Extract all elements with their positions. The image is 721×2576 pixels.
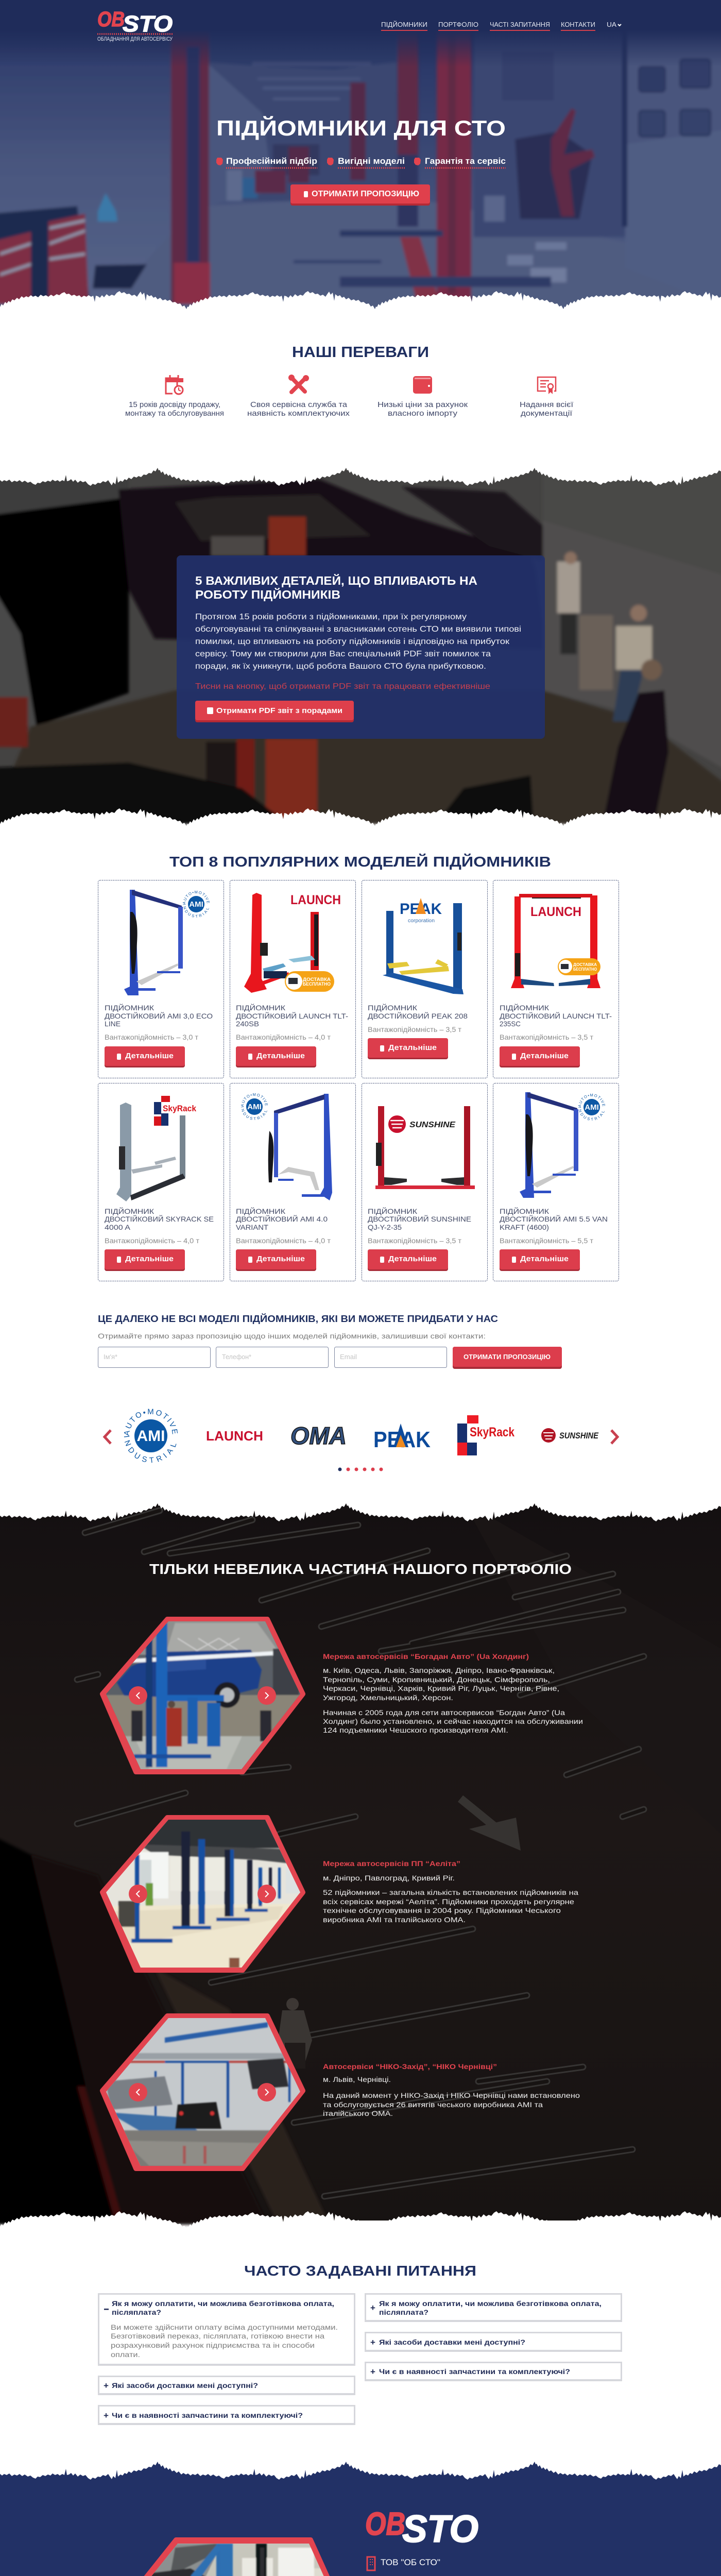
card: SkyRack SE 4000 A	[98, 1083, 224, 1281]
nav button previous	[129, 1686, 147, 1705]
project 1 title: Мережа автосервісів “Богадан Авто” (Ua Холдинг)	[323, 1652, 529, 1660]
FAQ right item 3: +	[370, 2367, 375, 2377]
button: PDF report	[195, 701, 354, 722]
hero bullets	[216, 156, 506, 168]
card text: ДВОСТІЙКОВИЙ PEAK 208	[368, 1011, 468, 1020]
project 1 cities	[323, 1666, 559, 1702]
portfolio part	[0, 1503, 721, 2227]
advantage text 4: документації	[521, 409, 573, 418]
logo: AMI: INDUSTRIAL	[124, 1436, 176, 1463]
card text: ДВОСТІЙКОВИЙ LAUNCH TLT-	[500, 1011, 612, 1020]
FAQ left item 1 open: Як я можу оплатити, чи можлива безготівкова оплата,	[112, 2299, 334, 2308]
hero button: ОТРИМАТИ ПРОПОЗИЦІЮ	[312, 190, 419, 198]
Sunshine logo	[388, 1115, 456, 1133]
logo: AMI	[122, 1408, 180, 1465]
button	[105, 1046, 185, 1067]
free delivery badge	[558, 958, 600, 975]
lift image	[124, 890, 183, 995]
project 2 cities: м. Дніпро, Павлоград, Кривий Ріг.	[323, 1874, 455, 1882]
section: contacts footer	[0, 2460, 721, 2576]
button	[236, 1249, 316, 1271]
input: email: Email	[340, 1353, 357, 1361]
FAQ left item 1 open: Безготівковий переказ, післяплата, готівкою внести на	[111, 2332, 324, 2340]
nav button next	[258, 2083, 276, 2102]
portfolio background	[0, 1502, 721, 2225]
FAQ right item 3: Чи є в наявності запчастини та комплектуючі?	[379, 2367, 570, 2376]
FAQ right item 2: Які засоби доставки мені доступні?	[379, 2338, 525, 2346]
card text: Вантажопідйомність – 3,5 т	[368, 1025, 462, 1033]
hexagon photo 3	[98, 2014, 304, 2169]
panel paragraph: обслуговуванні та спілкуванні з власниками сотень СТО ми виявили типові	[195, 625, 521, 634]
middle part: models, offer form, carousel	[98, 853, 619, 1471]
arrow right	[611, 1430, 617, 1444]
FAQ left item 2	[98, 2376, 355, 2395]
card text: 4000 A	[105, 1223, 131, 1231]
advantage text 1: монтажу та обслуговування	[125, 409, 224, 418]
input: name: Ім'я*	[104, 1353, 117, 1361]
PEAK logo: corporation	[408, 918, 435, 924]
logo: OB	[97, 7, 125, 31]
advantage text 2	[247, 400, 350, 418]
button	[236, 1046, 316, 1067]
FAQ left item 1 open: післяплата?	[112, 2308, 161, 2316]
AMI logo: AUTO•MOTIVE	[578, 1093, 605, 1107]
card text: ДВОСТІЙКОВИЙ LAUNCH TLT-	[236, 1011, 348, 1020]
lift image	[520, 1092, 578, 1198]
section: FAQ	[98, 2263, 622, 2425]
advantage text 2: наявність комплектуючих	[247, 409, 350, 418]
button: Детальніше	[520, 1052, 569, 1060]
navigation: ПОРТФОЛІО	[438, 21, 478, 28]
panel heading	[195, 573, 477, 601]
panel heading: 5 ВАЖЛИВИХ ДЕТАЛЕЙ, ЩО ВПЛИВАЮТЬ НА	[195, 573, 477, 587]
contact: company	[367, 2557, 440, 2570]
logo	[97, 7, 173, 42]
AMI logo	[182, 890, 210, 918]
advantages heading: НАШІ ПЕРЕВАГИ	[292, 344, 429, 361]
AMI logo	[241, 1093, 268, 1120]
footer background	[0, 2460, 721, 2576]
free delivery badge: БЕСПЛАТНО	[303, 981, 331, 987]
navigation: КОНТАКТИ	[561, 21, 595, 28]
button	[500, 1046, 580, 1067]
section: advantages	[125, 344, 574, 418]
card: LAUNCH TLT-235SC	[493, 880, 619, 1078]
nav button previous	[129, 1885, 147, 1903]
card text: ПІДЙОМНИК	[368, 1003, 418, 1012]
project 1 cities: Тернопіль, Суми, Кропивницький, Донецьк, Сімферополь,	[323, 1675, 550, 1684]
torn edge bottom of workshop photo	[0, 808, 721, 827]
portfolio heading: ТІЛЬКИ НЕВЕЛИКА ЧАСТИНА НАШОГО ПОРТФОЛІО	[149, 1561, 572, 1577]
SkyRack logo	[154, 1096, 196, 1126]
logo: STO	[123, 11, 173, 37]
PEAK logo: PEAK	[400, 901, 442, 918]
FAQ heading: ЧАСТО ЗАДАВАНІ ПИТАННЯ	[244, 2263, 476, 2279]
panel paragraph: помилки, що впливають на роботу підйомників і відповідно на прибуток	[195, 637, 510, 646]
hero bullets: Гарантія та сервіс	[425, 156, 506, 166]
logo: AMI: AUTO•MOTIVE	[124, 1409, 178, 1436]
project 1 cities: м. Київ, Одеса, Львів, Запоріжжя, Дніпро, Івано-Франківськ,	[323, 1666, 555, 1674]
project 2 description	[323, 1888, 578, 1924]
bottom part: FAQ and footer	[0, 2263, 721, 2576]
card text	[500, 1003, 612, 1041]
card text: KRAFT (4600)	[500, 1223, 549, 1231]
navigation	[381, 21, 621, 31]
FAQ right item 1: +	[370, 2303, 375, 2313]
LAUNCH logo: LAUNCH	[290, 893, 341, 907]
card: LAUNCH TLT-240SB	[230, 880, 355, 1078]
carousel dots	[338, 1467, 383, 1471]
arrow left	[105, 1430, 111, 1444]
card text: Вантажопідйомність – 4,0 т	[236, 1033, 331, 1041]
panel paragraph	[195, 613, 521, 671]
offer subtext: Отримайте прямо зараз пропозицію щодо інших моделей підйомників, залишивши свої контакти:	[98, 1332, 486, 1340]
project 3 description: На даний момент у НІКО-Захід і НІКО Чернівці нами встановлено	[323, 2091, 580, 2099]
AMI logo: INDUSTRIAL	[182, 904, 209, 918]
hexagon photo: workshop	[144, 2537, 330, 2576]
navigation: UA	[607, 21, 616, 28]
card text: Вантажопідйомність – 3,0 т	[105, 1033, 199, 1041]
logo: SkyRack: SkyRack	[470, 1425, 514, 1439]
form button: ОТРИМАТИ ПРОПОЗИЦІЮ	[464, 1353, 551, 1361]
logo: LAUNCH: LAUNCH	[206, 1428, 263, 1444]
hero background photo	[0, 0, 721, 309]
FAQ right item 2	[365, 2333, 622, 2352]
card text: Вантажопідйомність – 5,5 т	[500, 1236, 594, 1245]
FAQ left item 2: Які засоби доставки мені доступні?	[112, 2381, 258, 2389]
button: Детальніше	[388, 1255, 437, 1263]
card text: ПІДЙОМНИК	[368, 1207, 418, 1215]
models heading: ТОП 8 ПОПУЛЯРНИХ МОДЕЛЕЙ ПІДЙОМНИКІВ	[169, 853, 551, 870]
LAUNCH logo: LAUNCH	[530, 905, 581, 919]
card text: ПІДЙОМНИК	[500, 1207, 550, 1215]
icon: wrench and screwdriver	[289, 375, 308, 392]
card text	[236, 1207, 331, 1245]
card text: 240SB	[236, 1020, 259, 1028]
PEAK logo	[400, 898, 442, 924]
section: portfolio	[0, 1502, 721, 2225]
AMI logo: AMI	[189, 900, 203, 909]
nav button next	[258, 1885, 276, 1903]
footer logo: OB	[365, 2506, 405, 2542]
button: Детальніше	[256, 1052, 305, 1060]
navigation: ПІДЙОМНИКИ	[381, 21, 427, 28]
project 1 cities: Ужгород, Хмельницький, Херсон.	[323, 1693, 453, 1702]
torn edge bottom of portfolio	[0, 2210, 721, 2235]
logo: SUNSHINE	[541, 1428, 599, 1443]
footer logo	[365, 2506, 478, 2550]
FAQ left item 1 open: Ви можете здійснити оплату всіма доступними методами.	[111, 2323, 338, 2331]
card text: ПІДЙОМНИК	[500, 1003, 550, 1012]
lift image	[375, 1106, 475, 1189]
FAQ left item 1 open: оплати.	[111, 2350, 140, 2359]
card: AMI 5.5 VAN KRAFT	[493, 1083, 619, 1281]
card text: ДВОСТІЙКОВИЙ SUNSHINE	[368, 1214, 471, 1223]
FAQ left item 1 open: розрахунковий рахунок підприємства та ін способи	[111, 2341, 315, 2349]
lift image	[268, 1094, 332, 1200]
torn edge top of footer	[0, 2455, 721, 2481]
icon: wallet	[413, 376, 432, 394]
project 3	[98, 2014, 580, 2169]
project 1 description	[323, 1708, 583, 1734]
FAQ right item 3	[365, 2363, 622, 2381]
button	[368, 1249, 448, 1271]
AMI logo	[577, 1093, 606, 1122]
FAQ right item 1: післяплата?	[379, 2308, 428, 2316]
advantage text 3: власного імпорту	[388, 409, 458, 418]
lift image	[116, 1103, 185, 1201]
FAQ left item 3: +	[104, 2411, 109, 2420]
card text: Вантажопідйомність – 4,0 т	[105, 1236, 200, 1245]
card text: Вантажопідйомність – 3,5 т	[500, 1033, 594, 1041]
project 2 description: всіх сервісах мережі “Аеліта”. Підйомники проходять регулярне	[323, 1897, 574, 1906]
project 1 description: Холдинг) было установлено, и сейчас находится на обслуживании	[323, 1717, 583, 1725]
logo: ОБЛАДНАННЯ ДЛЯ АВТОСЕРВІСУ	[97, 36, 173, 42]
card text	[105, 1003, 213, 1041]
card text: Вантажопідйомність – 4,0 т	[236, 1236, 331, 1245]
card text: ДВОСТІЙКОВИЙ AMI 4.0	[236, 1214, 328, 1223]
logo: SUNSHINE: SUNSHINE	[559, 1431, 599, 1440]
hero title: ПІДЙОМНИКИ ДЛЯ СТО	[216, 115, 506, 140]
FAQ left item 1 open	[98, 2294, 355, 2366]
nav button previous	[129, 2083, 147, 2102]
brand carousel	[105, 1408, 617, 1471]
project 1 description: Начиная с 2005 года для сети автосервисов “Богдан Авто” (Ua	[323, 1708, 565, 1717]
advantage text 4: Надання всієї	[520, 400, 574, 409]
icon: certificate document	[538, 377, 556, 394]
project 2	[98, 1816, 578, 1971]
AMI logo: INDUSTRIAL	[578, 1107, 605, 1121]
card text: Вантажопідйомність – 3,5 т	[368, 1236, 462, 1245]
lift image	[383, 903, 464, 994]
card text: ПІДЙОМНИК	[105, 1003, 154, 1012]
hero bullets: Професійний підбір	[226, 156, 317, 166]
FAQ left item 2: +	[104, 2381, 109, 2391]
card text	[236, 1003, 348, 1041]
input: name	[98, 1347, 210, 1367]
button: Детальніше	[256, 1255, 305, 1263]
logo: PEAK: PEAK	[373, 1427, 431, 1452]
project 2 description: виробника АМІ та Італійського ОМА.	[323, 1916, 466, 1924]
torn edge top of workshop photo	[0, 466, 721, 486]
button	[368, 1038, 448, 1059]
card text	[105, 1207, 214, 1245]
background photo of workshop	[0, 466, 721, 824]
hero button	[290, 184, 430, 206]
card text	[368, 1003, 468, 1033]
red call to action line: Тисни на кнопку, щоб отримати PDF звіт та працювати ефективніше	[195, 682, 490, 691]
card: PEAK 208	[362, 880, 487, 1078]
project 3 title: Автосервіси “НІКО-Захід”, “НІКО Чернівці”	[323, 2062, 497, 2071]
AMI logo: AUTO•MOTIVE	[241, 1093, 268, 1107]
card text	[368, 1207, 471, 1245]
nav button next	[258, 1686, 276, 1705]
card text: ДВОСТІЙКОВИЙ AMI 5.5 VAN	[500, 1214, 608, 1223]
card: AMI 4.0 VARIANT	[230, 1083, 356, 1281]
card text: ПІДЙОМНИК	[236, 1207, 286, 1215]
advantage text 1	[125, 400, 224, 418]
free delivery badge: ДОСТАВКА	[573, 962, 597, 967]
project 2 description: 52 підйомники – загальна кількість встановлених підйомників на	[323, 1888, 578, 1896]
FAQ right item 2: +	[370, 2337, 375, 2347]
project 1	[98, 1618, 583, 1772]
advantage text 1: 15 років досвіду продажу,	[129, 400, 220, 409]
panel paragraph: Протягом 15 років роботи з підйомниками, при їх регулярному	[195, 613, 467, 621]
advantage text 2: Своя сервісна служба та	[250, 400, 348, 409]
card: Sunshine QJ-Y-2-35	[362, 1083, 487, 1281]
lift image	[511, 894, 600, 988]
input: phone: Телефон*	[222, 1353, 251, 1361]
advantage text 3	[377, 400, 468, 418]
button	[500, 1249, 580, 1271]
project 1 cities: Черкаси, Чернівці, Харків, Кривий Ріг, Луцьк, Чернігів, Рівне,	[323, 1684, 559, 1692]
card text: ДВОСТІЙКОВИЙ АМІ 3,0 ЕСО	[105, 1011, 213, 1020]
advantage text 4	[520, 400, 574, 418]
card text: 235SC	[500, 1020, 521, 1028]
card text: ДВОСТІЙКОВИЙ SKYRACK SE	[105, 1214, 214, 1223]
AMI logo: AMI	[585, 1103, 599, 1112]
section: top 8 models	[98, 853, 619, 1281]
panel paragraph: сервісу. Тому ми створили для Вас спеціальний PDF звіт помилок та	[195, 650, 491, 658]
FAQ right item 1: Як я можу оплатити, чи можлива безготівкова оплата,	[379, 2299, 602, 2308]
input: phone	[216, 1347, 329, 1367]
FAQ right item 1	[365, 2294, 622, 2322]
contact: company: ТОВ "ОБ СТО"	[381, 2557, 440, 2567]
button	[105, 1249, 185, 1271]
offer heading: ЦЕ ДАЛЕКО НЕ ВСІ МОДЕЛІ ПІДЙОМНИКІВ, ЯКІ ВИ МОЖЕТЕ ПРИДБАТИ У НАС	[98, 1313, 498, 1324]
free delivery badge: БЕСПЛАТНО	[573, 967, 597, 972]
section: 5 details	[0, 466, 721, 824]
project 3 cities: м. Львів, Чернівці.	[323, 2075, 391, 2083]
card text: QJ-Y-2-35	[368, 1223, 402, 1231]
Sunshine logo: SUNSHINE	[409, 1121, 456, 1129]
hexagon photo 1	[98, 1618, 304, 1772]
lift image	[244, 893, 319, 993]
SkyRack logo: SkyRack	[163, 1104, 196, 1113]
torn edge under hero	[0, 291, 721, 311]
torn edge top of portfolio	[0, 1497, 721, 1523]
panel heading: РОБОТУ ПІДЙОМНИКІВ	[195, 587, 340, 601]
icon: calendar clock	[166, 375, 183, 394]
project 2 title: Мережа автосервісів ПП “Аеліта”	[323, 1859, 460, 1868]
button: Детальніше	[388, 1043, 437, 1052]
navigation: ЧАСТІ ЗАПИТАННЯ	[490, 21, 550, 28]
logo: AMI: AMI	[137, 1428, 165, 1445]
FAQ left item 3	[98, 2406, 355, 2425]
advantage text 3: Низькі ціни за рахунок	[377, 400, 468, 409]
hero bullets: Вигідні моделі	[338, 156, 405, 166]
project 3 description: та обслуговується 26 витягів чеського виробника AMI та	[323, 2100, 543, 2109]
button: Детальніше	[520, 1255, 569, 1263]
logo: OMA: OMA	[290, 1422, 347, 1449]
project 3 description: італійського ОМА.	[323, 2109, 393, 2117]
top part: hero, advantages, 5 details	[0, 0, 721, 826]
form button	[453, 1347, 562, 1369]
button: PDF report: Отримати PDF звіт з порадами	[216, 706, 342, 715]
card: AMI 3.0 ECO LINE	[98, 880, 224, 1078]
card text: LINE	[105, 1020, 121, 1028]
button: Детальніше	[125, 1255, 174, 1263]
card text: ПІДЙОМНИК	[236, 1003, 286, 1012]
hero section	[0, 0, 721, 309]
hexagon photo 2	[98, 1816, 304, 1971]
FAQ left item 3: Чи є в наявності запчастини та комплектуючі?	[112, 2411, 303, 2419]
project 3 description	[323, 2091, 580, 2117]
footer logo: STO	[402, 2507, 478, 2550]
section: offer form	[98, 1313, 562, 1369]
button: Детальніше	[125, 1052, 174, 1060]
panel paragraph: поради, як їх уникнути, щоб робота Вашого СТО була прибутковою.	[195, 662, 486, 671]
AMI logo: INDUSTRIAL	[241, 1107, 267, 1120]
free delivery badge: ДОСТАВКА	[303, 977, 331, 982]
AMI logo: AUTO•MOTIVE	[182, 890, 210, 904]
free delivery badge	[285, 971, 334, 992]
card text	[500, 1207, 608, 1245]
card text: ПІДЙОМНИК	[105, 1207, 154, 1215]
card text: VARIANT	[236, 1223, 268, 1231]
project 2 description: технічне обслуговування із 2004 року. Підйомники Чеського	[323, 1906, 561, 1914]
AMI logo: AMI	[247, 1103, 262, 1111]
project 1 description: 124 подъемники Чешского производителя AMI.	[323, 1726, 508, 1734]
input: email	[335, 1347, 447, 1367]
panel: 5 details	[177, 555, 545, 739]
logo: SkyRack	[457, 1415, 514, 1455]
